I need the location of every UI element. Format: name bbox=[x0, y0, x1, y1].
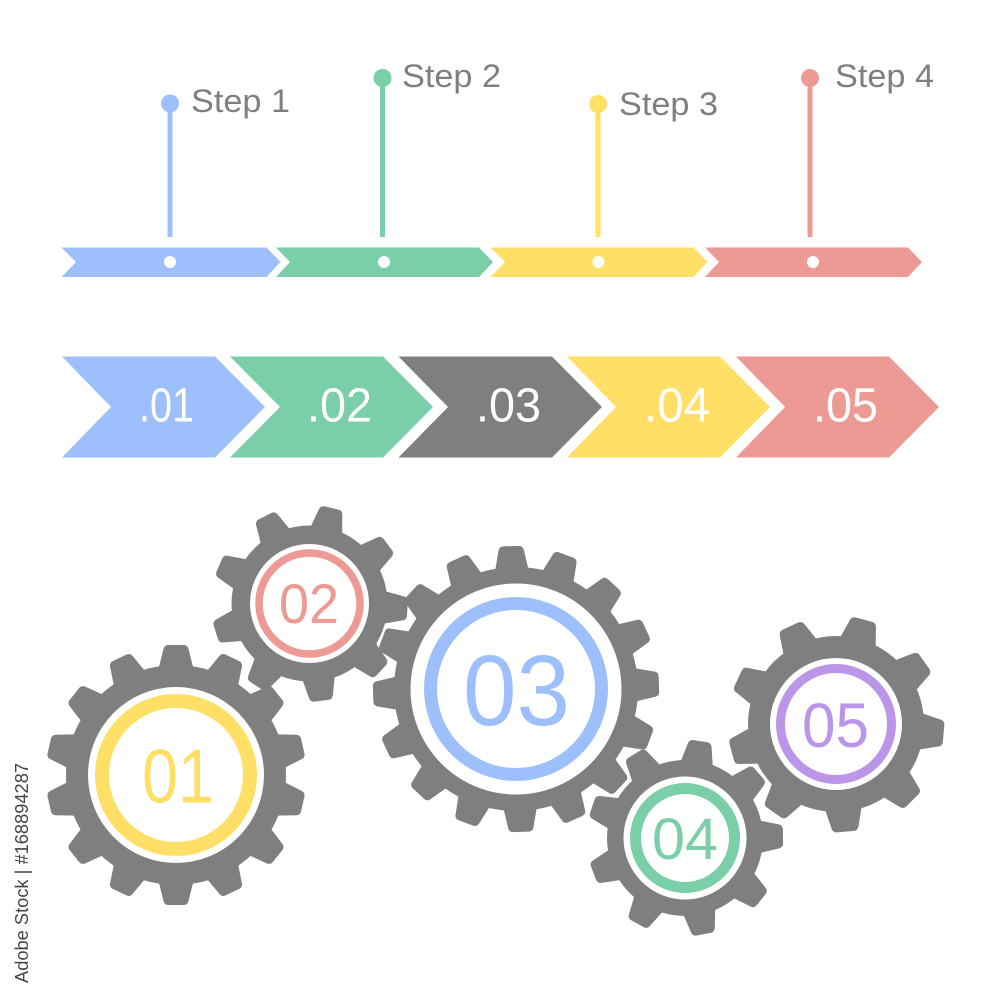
gear 04 bbox=[587, 739, 783, 937]
timeline arrow 4 bbox=[705, 248, 922, 277]
panel: gears bbox=[45, 504, 945, 937]
panel: step timeline bbox=[62, 58, 934, 277]
chevron 03: .03 bbox=[476, 380, 541, 432]
gear 05: 05 bbox=[802, 691, 869, 761]
step 3 marker: Step 3 bbox=[619, 86, 718, 122]
gear 01: 01 bbox=[142, 734, 214, 820]
chevron 02: .02 bbox=[307, 380, 372, 432]
timeline arrow 2 bbox=[276, 248, 493, 277]
gear 02 bbox=[211, 504, 408, 703]
step 2 marker: Step 2 bbox=[402, 58, 501, 94]
panel: numbered chevrons bbox=[62, 356, 939, 458]
step 4 marker: Step 4 bbox=[835, 58, 934, 94]
timeline arrow 3 bbox=[490, 248, 708, 277]
step 1 marker bbox=[161, 83, 290, 237]
chevron 01 bbox=[62, 356, 265, 458]
gear 03: 03 bbox=[463, 635, 570, 747]
step 3 marker bbox=[589, 86, 718, 237]
step 2 marker bbox=[374, 58, 501, 237]
chevron 04 bbox=[567, 356, 770, 458]
gear 04: 04 bbox=[652, 807, 718, 872]
step 4 marker bbox=[801, 58, 934, 237]
gear 02: 02 bbox=[279, 572, 339, 635]
chevron 03 bbox=[398, 356, 602, 458]
gear 03 bbox=[373, 546, 659, 832]
chevron 05: .05 bbox=[813, 380, 878, 432]
timeline arrow 1 bbox=[62, 248, 280, 277]
gear 05 bbox=[727, 615, 945, 833]
gear 01 bbox=[45, 645, 307, 905]
chevron 02 bbox=[230, 356, 433, 458]
chevron 05 bbox=[736, 356, 939, 458]
chevron 04: .04 bbox=[644, 380, 710, 432]
chevron 01: .01 bbox=[139, 380, 194, 432]
side credit text: Adobe Stock | #168894287 bbox=[12, 763, 32, 983]
step 1 marker: Step 1 bbox=[191, 83, 290, 119]
